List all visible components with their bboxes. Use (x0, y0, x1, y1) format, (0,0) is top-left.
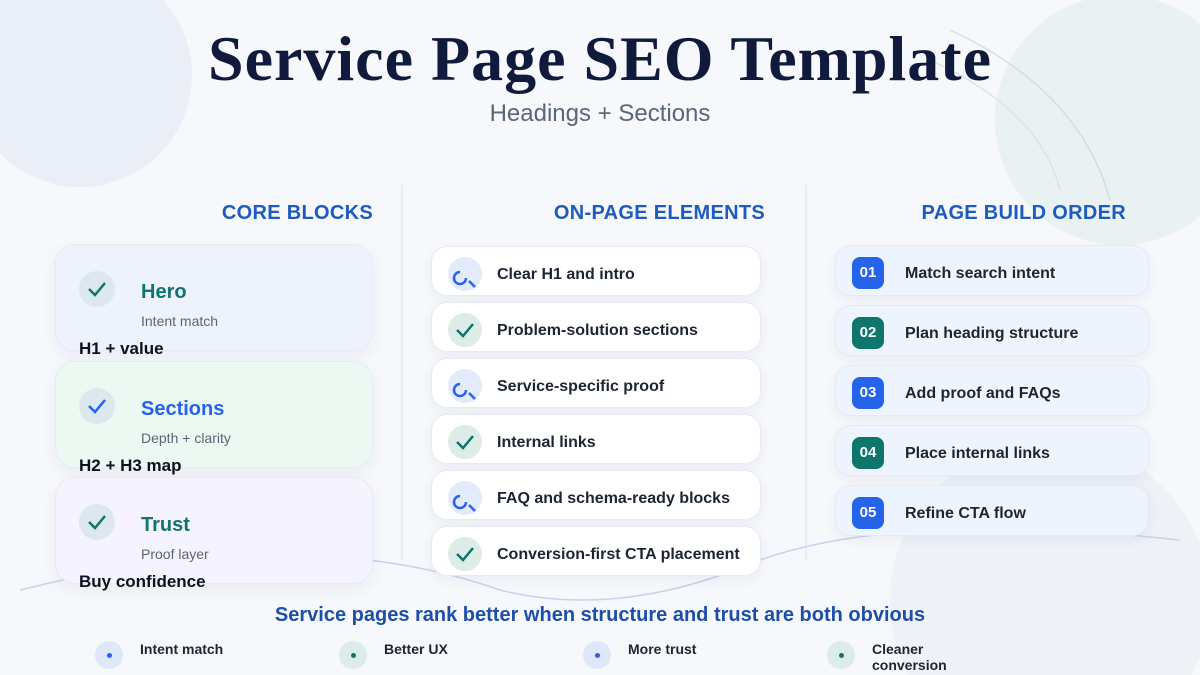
item: FAQ (431, 470, 761, 520)
step 03 (835, 365, 1149, 416)
card: hero: Hero (141, 281, 187, 303)
step 04: Place internal links (905, 445, 1050, 462)
card: sections: Sections (141, 398, 224, 420)
step 03: Add proof and FAQs (905, 385, 1061, 402)
card: trust: Buy confidence (79, 572, 206, 591)
item: Problem-solution (431, 302, 761, 352)
title: Service Page SEO Template (208, 23, 992, 94)
tagline: Service pages rank better when structure and trust are both obvious (275, 604, 925, 626)
benefit: better UX: Better UX (384, 641, 448, 657)
item: proof (431, 358, 761, 408)
panel: on-page elements (431, 246, 761, 578)
step 01: Match search intent (905, 265, 1055, 282)
heading: page build order: PAGE BUILD ORDER (922, 202, 1126, 224)
panel: core blocks (55, 244, 373, 591)
card: sections: H2 + H3 map (79, 456, 182, 475)
item: Clear H1 (431, 246, 761, 296)
step 04: 04 (860, 444, 876, 461)
card: trust: Proof layer (141, 546, 209, 562)
benefit: better UX (339, 641, 448, 669)
item: Problem-solution: Problem-solution sections (497, 322, 698, 339)
panel: page build order (835, 245, 1149, 538)
step 05: 05 (860, 504, 876, 521)
item: FAQ: FAQ and schema-ready blocks (497, 490, 730, 507)
step 02: 02 (860, 324, 876, 341)
item: internal links: Internal links (497, 434, 596, 451)
benefit: more trust (583, 641, 696, 669)
benefit: more trust: More trust (628, 641, 696, 657)
step 02: Plan heading structure (905, 325, 1078, 342)
benefit: cleaner conversion (827, 641, 947, 673)
card: trust (55, 477, 373, 584)
item: CTA: Conversion-first CTA placement (497, 546, 740, 563)
step 05: Refine CTA flow (905, 505, 1026, 522)
step 03: 03 (860, 384, 876, 401)
benefit: cleaner conversion: Cleaner (872, 641, 923, 657)
benefits row (95, 641, 947, 673)
subtitle: Headings + Sections (490, 100, 710, 127)
item: Clear H1: Clear H1 and intro (497, 266, 635, 283)
card: hero (55, 244, 373, 351)
step 04 (835, 425, 1149, 476)
benefit: cleaner conversion: conversion (872, 657, 947, 673)
benefit: intent match: Intent match (140, 641, 223, 657)
heading: core blocks: CORE BLOCKS (222, 202, 373, 224)
step 05 (835, 485, 1149, 536)
item: proof: Service-specific proof (497, 378, 664, 395)
card: sections: Depth + clarity (141, 430, 231, 446)
heading: on-page elements: ON-PAGE ELEMENTS (554, 202, 765, 224)
step 02 (835, 305, 1149, 356)
card: hero: Intent match (141, 313, 218, 329)
item: CTA (431, 526, 761, 576)
step 01 (835, 245, 1149, 296)
step 01: 01 (860, 264, 876, 281)
card: sections (55, 361, 373, 468)
item: internal links (431, 414, 761, 464)
benefit: intent match (95, 641, 223, 669)
card: trust: Trust (141, 514, 190, 536)
card: hero: H1 + value (79, 339, 164, 358)
